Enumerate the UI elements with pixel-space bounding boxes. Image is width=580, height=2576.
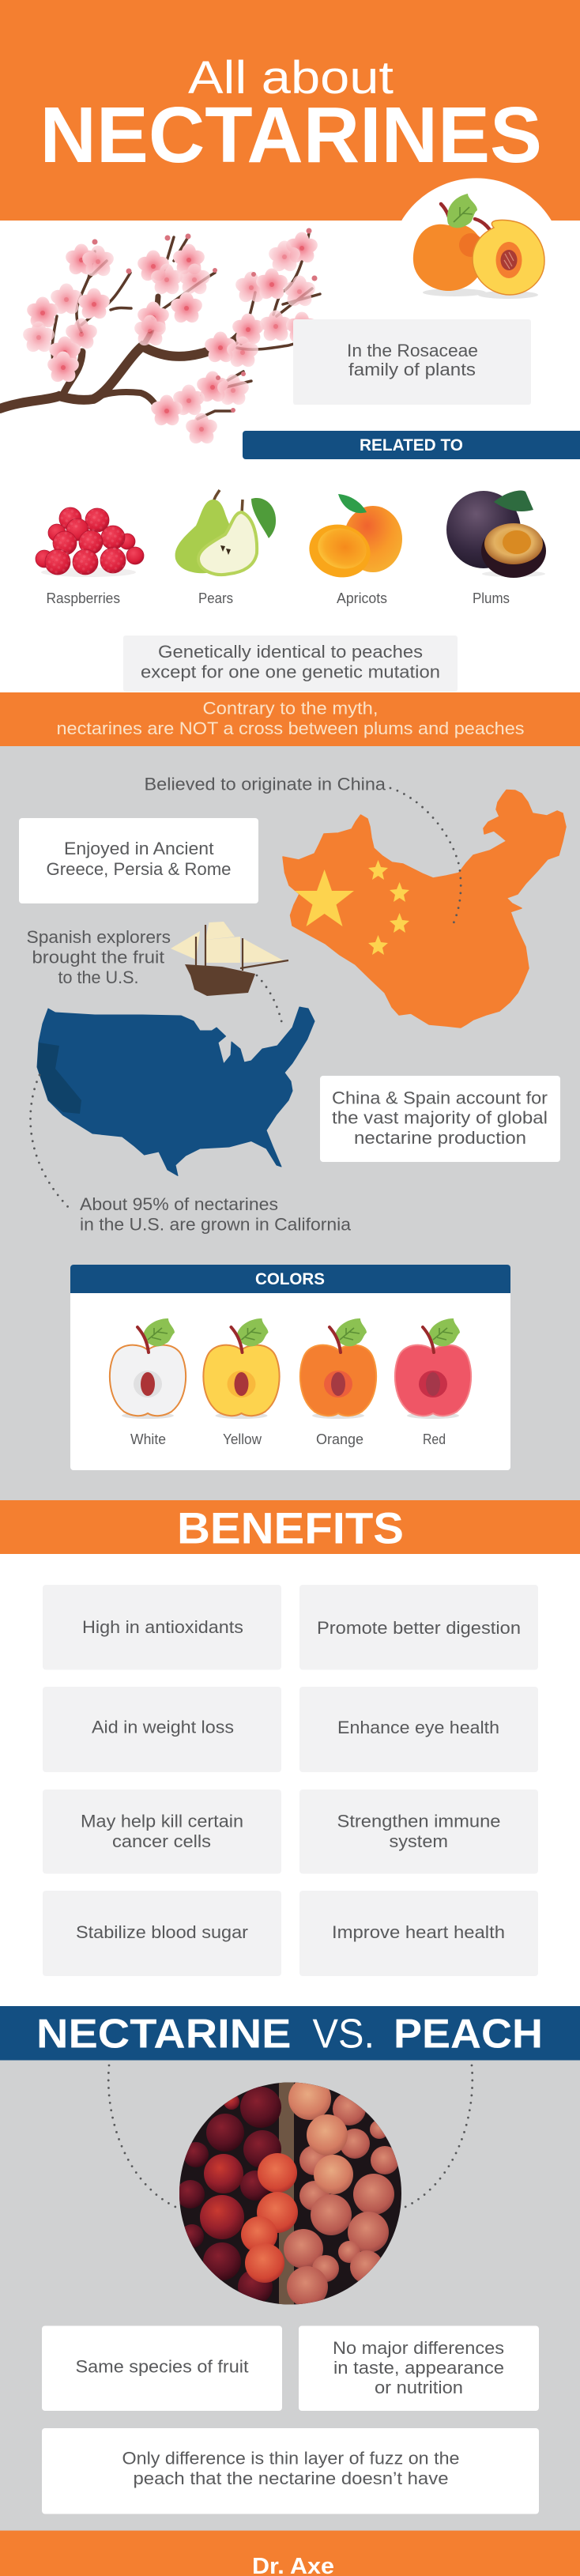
callout: ancient Greece: Enjoyed in Ancient (64, 839, 213, 858)
text: California share: in the U.S. are grown in California (80, 1214, 352, 1235)
callout: Rosaceae family: In the Rosaceae (347, 341, 478, 360)
card: May help kill certain (81, 1812, 243, 1831)
heading band: nectarine vs peach: NECTARINE (36, 2011, 292, 2057)
fruit: white (110, 1318, 186, 1419)
card: only difference: Only difference is thin layer of fuzz on the (122, 2449, 460, 2468)
footer: Dr. Axe (0, 2531, 580, 2576)
panel: comparison background (0, 2060, 580, 2531)
card (43, 1790, 281, 1873)
card: High in antioxidants (82, 1617, 243, 1637)
banner: myth (0, 692, 580, 746)
label: white: White (130, 1431, 166, 1447)
label: yellow: Yellow (223, 1431, 262, 1447)
label: Raspberries: Raspberries (46, 590, 120, 606)
card: no major differences: in taste, appearance (333, 2358, 504, 2378)
callout: Rosaceae family: family of plants (348, 360, 476, 379)
callout: China and Spain: the vast majority of global (332, 1108, 548, 1127)
card (299, 1585, 538, 1669)
text: originate in China: Believed to originate in China (144, 775, 386, 794)
callout: ancient Greece (19, 818, 258, 903)
dotted arc: left (108, 2065, 175, 2207)
fruit: orange (300, 1318, 376, 1419)
callout: China and Spain: China & Spain account for (332, 1088, 548, 1108)
text: Spanish explorers: Spanish explorers (27, 927, 171, 947)
dotted connector: California (31, 1075, 73, 1212)
card: Stabilize blood sugar (76, 1922, 248, 1942)
text: Spanish explorers: to the U.S. (58, 967, 139, 987)
illustration: cherry blossom branch (0, 228, 320, 447)
callout: Rosaceae family (293, 319, 531, 405)
callout: genetically identical (123, 636, 458, 692)
label: Plums: Plums (473, 590, 510, 606)
card: same species: Same species of fruit (76, 2357, 248, 2376)
map: China with stars (283, 790, 566, 1028)
banner: myth: Contrary to the myth, (202, 699, 378, 718)
callout: genetically identical: Genetically identical to peaches (158, 642, 423, 662)
label: Pears: Pears (198, 590, 233, 606)
card: same species (42, 2325, 282, 2411)
card: no major differences: No major differences (333, 2338, 504, 2358)
title: NECTARINES: NECTARINES (40, 91, 542, 179)
card: cancer cells (112, 1831, 211, 1851)
heading bar: related to: RELATED TO (360, 436, 463, 454)
heading band: benefits: BENEFITS (177, 1503, 404, 1552)
heading: colors (70, 1265, 510, 1293)
card (299, 1790, 538, 1873)
dotted arc: right (405, 2065, 473, 2207)
icon: raspberries (36, 507, 144, 577)
heading band: nectarine vs peach: PEACH (394, 2011, 543, 2057)
card: no major differences (299, 2325, 539, 2411)
photo: nectarines and peaches (176, 2077, 401, 2307)
card: Promote better digestion (317, 1618, 521, 1638)
callout: genetically identical: except for one one genetic mutation (141, 662, 440, 681)
callout: China and Spain: nectarine production (354, 1128, 526, 1148)
banner: myth: nectarines are NOT a cross between plums and peaches (57, 718, 525, 738)
heading band: benefits (0, 1500, 580, 1554)
heading band: nectarine vs peach (0, 2006, 580, 2060)
title: All about: All about (188, 52, 394, 104)
panel: benefits grid (43, 1585, 538, 1976)
card: only difference (42, 2428, 539, 2514)
label: red: Red (423, 1431, 446, 1447)
fruit: red (395, 1318, 471, 1419)
region: California (37, 1043, 81, 1114)
card (43, 1585, 281, 1669)
card: Strengthen immune (337, 1812, 501, 1831)
callout: ancient Greece: Greece, Persia & Rome (46, 859, 231, 879)
card (299, 1687, 538, 1772)
text: California share: About 95% of nectarines (80, 1194, 278, 1214)
card (43, 1891, 281, 1976)
dotted connector: China (390, 788, 461, 925)
card: Enhance eye health (337, 1718, 499, 1737)
icon: plums (446, 491, 546, 578)
card: only difference: peach that the nectarine doesn’t have (133, 2469, 449, 2488)
card: system (389, 1831, 448, 1851)
panel: colors (70, 1265, 510, 1470)
header band (0, 0, 580, 221)
card: Improve heart health (332, 1922, 505, 1942)
icon: apricots (303, 494, 402, 584)
text: California share (80, 1194, 352, 1235)
card (299, 1891, 538, 1976)
icon: pears (175, 490, 276, 575)
text: Spanish explorers (27, 927, 171, 987)
text: Spanish explorers: brought the fruit (32, 947, 164, 967)
label: Apricots: Apricots (337, 590, 387, 606)
label: orange: Orange (316, 1431, 363, 1447)
panel: colors: COLORS (255, 1270, 325, 1288)
card: no major differences: or nutrition (375, 2378, 463, 2397)
card: Aid in weight loss (92, 1717, 234, 1737)
icon: nectarine whole and cut (389, 178, 564, 353)
heading band: nectarine vs peach: VS. (313, 2011, 375, 2057)
dotted connector: ship to US (257, 975, 283, 1028)
heading bar: related to (243, 431, 580, 459)
panel: origin background (0, 746, 580, 1500)
card (43, 1687, 281, 1772)
fruit: yellow (203, 1318, 280, 1419)
callout: China and Spain (320, 1076, 560, 1162)
icon: ship (171, 922, 288, 996)
map: United States (37, 1007, 314, 1176)
